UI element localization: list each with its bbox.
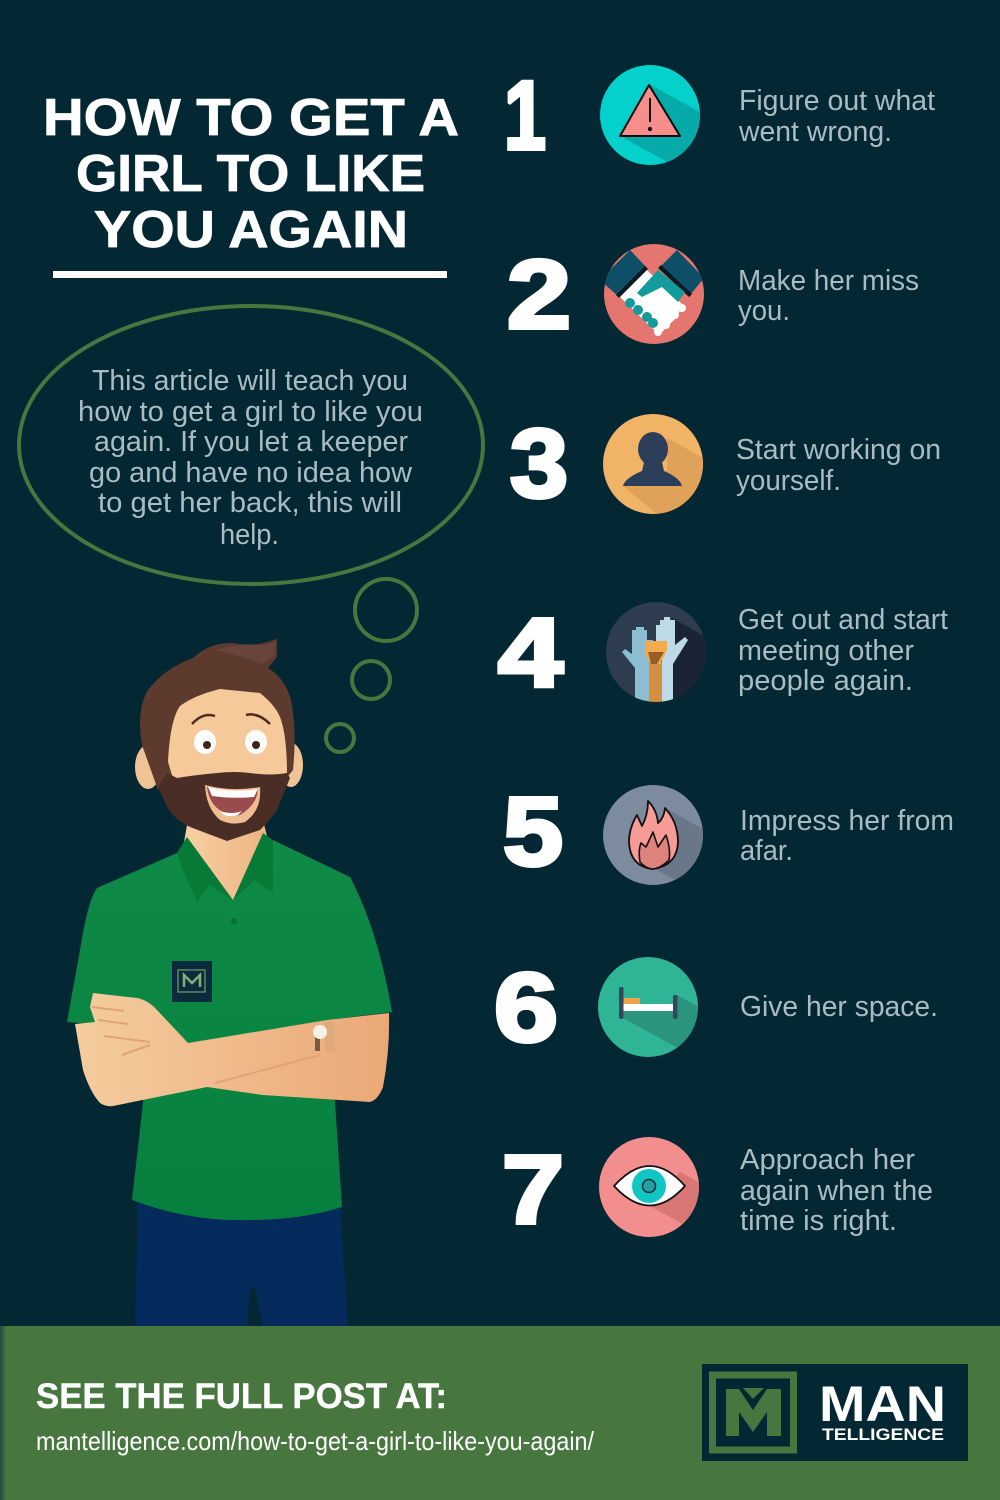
text: step 3: yourself. xyxy=(736,465,841,497)
text: step 3 xyxy=(736,434,941,497)
footer url: mantelligence.com/how-to-get-a-girl-to-like-you-again/ xyxy=(36,1426,595,1456)
number 5: 5 xyxy=(503,777,563,886)
text: step 5: afar. xyxy=(740,835,793,867)
text: step 1 xyxy=(738,85,935,148)
intro text: how to get a girl to like you xyxy=(78,396,423,428)
intro text: This article will teach you xyxy=(92,365,408,397)
text: step 3: Start working on xyxy=(736,434,941,466)
text: step 7: again when the xyxy=(740,1175,933,1207)
title: GIRL TO LIKE xyxy=(76,145,425,203)
text: step 4: people again. xyxy=(738,665,913,697)
hair highlight xyxy=(215,642,275,664)
icon: flame xyxy=(603,785,703,885)
ears xyxy=(135,743,303,789)
thought bubble xyxy=(19,306,483,752)
icon: raised hands xyxy=(606,602,706,702)
icon: bed xyxy=(598,957,698,1057)
step 1 xyxy=(507,65,935,165)
beard xyxy=(158,772,290,841)
number 6: 6 xyxy=(494,953,558,1062)
mouth xyxy=(205,785,260,824)
text: step 5 xyxy=(740,805,954,867)
shirt logo xyxy=(172,961,212,1002)
step 7 xyxy=(504,1137,932,1237)
intro text: to get her back, this will xyxy=(98,487,402,519)
intro text: help. xyxy=(220,519,279,551)
hair xyxy=(140,639,295,790)
step 2 xyxy=(507,240,919,349)
logo xyxy=(702,1364,968,1461)
text: step 2: you. xyxy=(738,295,790,327)
footer band xyxy=(0,1326,1000,1500)
step 6 xyxy=(496,957,936,1057)
text: step 7: time is right. xyxy=(740,1205,897,1237)
step 5 xyxy=(504,785,952,885)
arms xyxy=(75,993,389,1106)
number 2: 2 xyxy=(507,240,571,349)
number 3: 3 xyxy=(510,409,568,518)
text: step 7 xyxy=(740,1144,933,1237)
neck xyxy=(183,820,268,900)
title xyxy=(43,89,459,259)
face xyxy=(168,689,287,785)
text: step 7: Approach her xyxy=(740,1144,915,1176)
eyes and brows xyxy=(192,714,270,754)
footer heading: SEE THE FULL POST AT: xyxy=(36,1377,447,1416)
trousers xyxy=(135,1200,348,1328)
logo: TELLIGENCE xyxy=(822,1425,944,1444)
character: man with crossed arms xyxy=(67,639,392,1328)
text: step 2 xyxy=(738,265,919,327)
text: step 5: Impress her from xyxy=(740,805,954,837)
text: step 2: Make her miss xyxy=(738,265,919,297)
title: YOU AGAIN xyxy=(94,201,408,259)
title underline xyxy=(53,271,447,278)
step 3 xyxy=(510,414,940,514)
text: step 1: Figure out what xyxy=(739,85,935,117)
text: step 4 xyxy=(738,604,948,697)
collar xyxy=(177,833,273,902)
intro text: again. If you let a keeper xyxy=(94,426,408,458)
logo: MAN xyxy=(819,1376,946,1432)
step 4 xyxy=(497,602,948,702)
number 4: 4 xyxy=(498,598,563,707)
icon: warning triangle xyxy=(600,65,700,165)
icon: eye xyxy=(599,1137,699,1237)
title: HOW TO GET A xyxy=(43,89,459,147)
shirt xyxy=(67,840,392,1220)
text: step 1: went wrong. xyxy=(738,116,892,148)
text: step 6: Give her space. xyxy=(740,991,938,1023)
intro text: go and have no idea how xyxy=(89,457,413,489)
icon: handshake xyxy=(600,244,704,344)
number 7: 7 xyxy=(502,1135,564,1244)
text: step 4: meeting other xyxy=(738,635,914,667)
icon: person xyxy=(603,414,703,514)
intro text xyxy=(78,365,423,551)
number 1: 1 xyxy=(504,61,546,170)
shirt button xyxy=(231,918,237,924)
text: step 4: Get out and start xyxy=(738,604,948,636)
wristwatch xyxy=(313,1022,335,1052)
